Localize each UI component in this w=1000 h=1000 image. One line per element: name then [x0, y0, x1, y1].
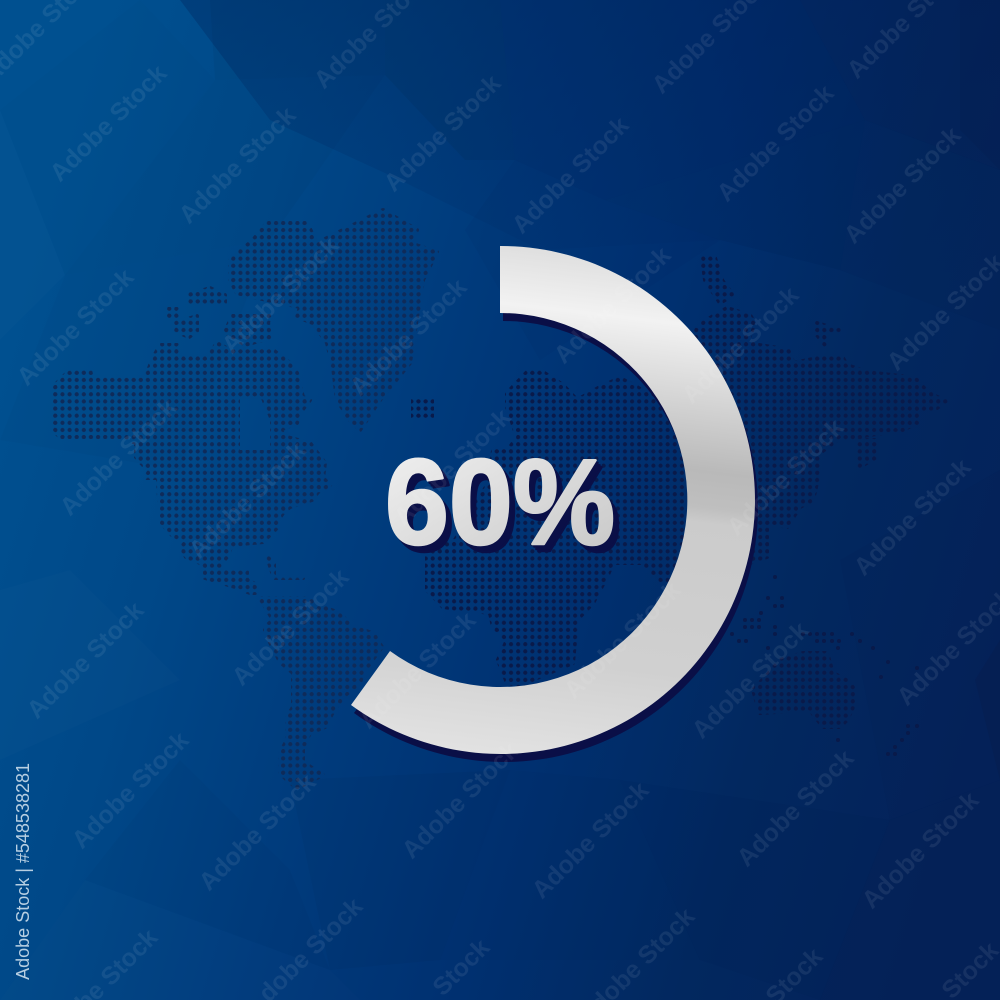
stock watermarks: Adobe Stock — [686, 616, 814, 744]
dotted world map east — [413, 258, 946, 756]
stock watermarks: Adobe Stock — [353, 606, 481, 734]
stock watermarks: Adobe Stock — [193, 768, 321, 896]
stock watermarks: Adobe Stock — [378, 69, 506, 197]
progress ring 60% — [351, 246, 755, 754]
stock watermarks: Adobe Stock — [21, 596, 149, 724]
label shadow mid: 60% — [389, 439, 619, 575]
continent: North America — [53, 343, 330, 593]
label text: 60% — [385, 434, 615, 570]
label shadow far: 60% — [391, 441, 621, 577]
arctic islands east — [175, 316, 197, 337]
stock watermarks: Adobe Stock — [838, 121, 966, 249]
stock watermarks: Adobe Stock — [54, 393, 182, 521]
stock watermarks: Adobe Stock — [44, 59, 172, 187]
stock watermarks: Adobe Stock — [856, 786, 984, 914]
continent: South America — [260, 598, 382, 788]
arctic islands north — [188, 288, 225, 302]
stock watermarks: Adobe Stock — [396, 736, 524, 864]
central america islands — [267, 557, 303, 578]
label shadow near: 60% — [387, 436, 617, 572]
stock watermarks: Adobe Stock — [388, 403, 516, 531]
northern island east — [817, 323, 840, 345]
Kamchatka — [857, 440, 877, 467]
stock watermarks: Adobe Stock — [848, 453, 976, 581]
stock watermarks: Stock — [427, 933, 495, 1000]
stock watermarks: Adobe Stock — [173, 101, 301, 229]
stock watermarks: Adobe Stock — [731, 744, 859, 872]
stock watermarks: Adobe Stock — [66, 726, 194, 854]
stock watermarks: Adobe Stock — [711, 79, 839, 207]
Indonesia and Pacific islands — [730, 575, 919, 756]
stock watermarks: Adobe Stock — [558, 576, 686, 704]
stock watermarks: Adobe Stock — [548, 241, 676, 369]
stock id caption: Adobe Stock | #548538281 — [13, 763, 33, 980]
stock watermarks: Adobe Stock — [344, 273, 472, 401]
continent: Australia — [753, 653, 855, 727]
arctic island: Baffin — [225, 316, 272, 345]
stock watermarks: Adobe Stock — [506, 111, 634, 239]
top shading — [180, 0, 1000, 330]
percentage label — [385, 434, 621, 577]
stock watermarks: Adobe Stock — [11, 263, 139, 391]
arctic islands small — [167, 309, 177, 316]
stock watermarks: Adobe Stock — [216, 231, 344, 359]
stock watermarks: Adobe Stock — [676, 281, 804, 409]
ring shadow — [354, 254, 758, 762]
continent: Greenland — [230, 210, 437, 430]
northern island — [702, 258, 733, 303]
stock watermarks: Adobe Stock — [721, 413, 849, 541]
stock watermarks: Adobe Stock — [226, 563, 354, 691]
stock watermarks: Adobe Stock — [526, 776, 654, 904]
stock watermarks: Adobe Stock — [183, 436, 311, 564]
dotted world map west — [53, 210, 437, 788]
continents: Europe, Africa and Asia — [427, 308, 946, 685]
small island cluster — [413, 400, 432, 417]
